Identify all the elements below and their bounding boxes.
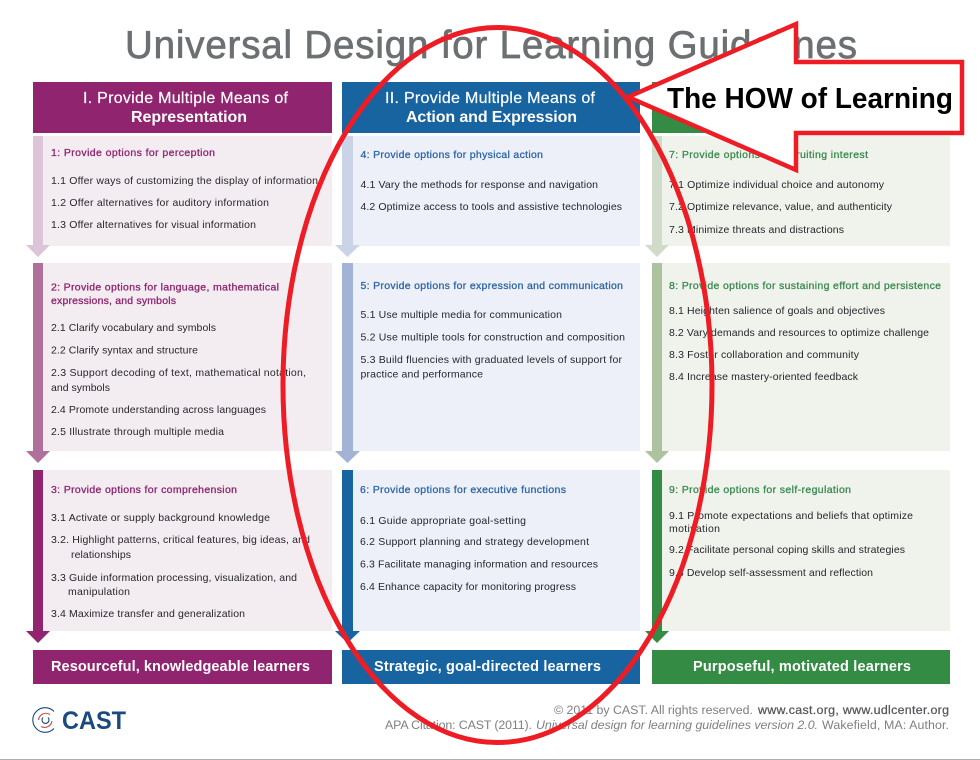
panel: guideline 9 self-regulation: motivation [669, 523, 720, 535]
panel: guideline 1 perception: 1.3 Offer alternatives for visual information [51, 219, 256, 231]
logo: CAST: CAST [62, 707, 126, 735]
panel: guideline 2 language: 2.3 Support decoding of text, mathematical notation, [51, 367, 306, 379]
panel: guideline 9 self-regulation: 9.3 Develop self-assessment and reflection [669, 567, 873, 579]
panel: guideline 4 physical action: 4: Provide options for physical action [360, 149, 543, 161]
panel: guideline 6 executive functions: 6.4 Enhance capacity for monitoring progress [360, 581, 576, 593]
header: action and expression: II. Provide Multiple Means of [385, 90, 596, 107]
panel: guideline 2 language: 2: Provide options for language, mathematical [51, 282, 279, 294]
header: representation [33, 82, 332, 133]
panel: guideline 2 language: 2.4 Promote understanding across languages [51, 404, 266, 416]
panel: guideline 8 sustaining effort: 8.4 Increase mastery-oriented feedback [669, 371, 859, 383]
column III: engagement [645, 82, 950, 684]
callout arrow: The HOW of Learning [628, 24, 962, 170]
panel: guideline 7 recruiting interest: 7.2 Optimize relevance, value, and authenticity [669, 201, 893, 213]
panel: guideline 7 recruiting interest: 7: Provide options for recruiting interest [669, 149, 868, 161]
footer bar: resourceful learners [33, 650, 332, 684]
panel: guideline 9 self-regulation [645, 470, 950, 643]
title: Universal Design for Learning Guidelines [125, 24, 857, 67]
panel: guideline 1 perception: 1.1 Offer ways of customizing the display of information [51, 175, 318, 187]
panel: guideline 6 executive functions: 6.1 Guide appropriate goal-setting [360, 515, 526, 527]
panel: guideline 3 comprehension: 3.1 Activate or supply background knowledge [51, 512, 270, 524]
footer bar: strategic learners: Strategic, goal-directed learners [374, 659, 601, 675]
panel: guideline 7 recruiting interest: 7.3 Minimize threats and distractions [669, 224, 844, 236]
footer bar: strategic learners [342, 650, 640, 684]
panel: guideline 2 language: expressions, and symbols [51, 295, 176, 307]
panel: guideline 8 sustaining effort: 8: Provide options for sustaining effort and persistence [669, 280, 941, 292]
panel: guideline 8 sustaining effort [645, 263, 950, 463]
panel: guideline 2 language [26, 263, 332, 463]
footer bar: purposeful learners: Purposeful, motivated learners [693, 659, 911, 675]
copyright and citation [385, 703, 949, 732]
panel: guideline 5 expression and communication: practice and performance [360, 368, 483, 380]
footer bar: resourceful learners: Resourceful, knowledgeable learners [51, 659, 310, 675]
panel: guideline 3 comprehension: 3: Provide options for comprehension [51, 484, 237, 496]
panel: guideline 2 language: and symbols [51, 382, 110, 394]
panel: guideline 5 expression and communication: 5.2 Use multiple tools for construction and composition [360, 332, 625, 344]
copyright and citation: APA Citation: CAST (2011). [385, 718, 532, 732]
footer bar: purposeful learners [652, 650, 950, 684]
panel: guideline 6 executive functions [335, 470, 640, 643]
panel: guideline 8 sustaining effort: 8.1 Heighten salience of goals and objectives [669, 305, 885, 317]
callout arrow: The HOW of Learning: The HOW of Learning [667, 83, 953, 115]
panel: guideline 7 recruiting interest [645, 136, 950, 257]
panel: guideline 5 expression and communication: 5.1 Use multiple media for communication [360, 309, 562, 321]
column I: representation [26, 82, 332, 684]
copyright and citation: www.cast.org, www.udlcenter.org [757, 703, 949, 717]
panel: guideline 3 comprehension [26, 470, 332, 643]
panel: guideline 3 comprehension: 3.2. Highlight patterns, critical features, big ideas, and [51, 534, 310, 546]
panel: guideline 6 executive functions: 6.3 Facilitate managing information and resources [360, 558, 598, 570]
header: representation: Representation [131, 109, 247, 126]
red ellipse annotation [283, 28, 712, 742]
copyright and citation: Universal design for learning guidelines version 2.0. [536, 718, 818, 732]
panel: guideline 3 comprehension: relationships [71, 549, 131, 561]
copyright and citation: © 2011 by CAST. All rights reserved. [554, 703, 753, 717]
panel: guideline 5 expression and communication [335, 263, 640, 463]
panel: guideline 8 sustaining effort: 8.2 Vary demands and resources to optimize challenge [669, 327, 929, 339]
panel: guideline 4 physical action: 4.1 Vary the methods for response and navigation [360, 179, 598, 191]
panel: guideline 8 sustaining effort: 8.3 Foster collaboration and community [669, 349, 860, 361]
panel: guideline 3 comprehension: 3.3 Guide information processing, visualization, and [51, 572, 297, 584]
panel: guideline 4 physical action: 4.2 Optimize access to tools and assistive technologies [360, 201, 622, 213]
header: engagement [652, 82, 950, 133]
panel: guideline 2 language: 2.1 Clarify vocabulary and symbols [51, 322, 216, 334]
panel: guideline 2 language: 2.2 Clarify syntax and structure [51, 344, 198, 356]
panel: guideline 6 executive functions: 6.2 Support planning and strategy development [360, 536, 589, 548]
panel: guideline 6 executive functions: 6: Provide options for executive functions [360, 484, 566, 496]
panel: guideline 3 comprehension: manipulation [68, 586, 130, 598]
header: action and expression [342, 82, 640, 133]
logo: CAST [33, 707, 126, 735]
panel: guideline 7 recruiting interest: 7.1 Optimize individual choice and autonomy [669, 179, 885, 191]
panel: guideline 1 perception [26, 136, 332, 257]
copyright and citation: Wakefield, MA: Author. [822, 718, 949, 732]
panel: guideline 5 expression and communication: 5: Provide options for expression and communication [360, 280, 623, 292]
header: action and expression: Action and Expression [406, 109, 577, 126]
header: representation: I. Provide Multiple Means of [83, 90, 289, 107]
panel: guideline 9 self-regulation: 9.2 Facilitate personal coping skills and strategies [669, 544, 905, 556]
panel: guideline 9 self-regulation: 9: Provide options for self-regulation [669, 484, 851, 496]
panel: guideline 1 perception: 1.2 Offer alternatives for auditory information [51, 197, 269, 209]
panel: guideline 1 perception: 1: Provide options for perception [51, 147, 215, 159]
panel: guideline 4 physical action [335, 136, 640, 257]
panel: guideline 5 expression and communication: 5.3 Build fluencies with graduated levels of support for [360, 354, 622, 366]
panel: guideline 2 language: 2.5 Illustrate through multiple media [51, 426, 224, 438]
panel: guideline 9 self-regulation: 9.1 Promote expectations and beliefs that optimize [669, 510, 913, 522]
panel: guideline 3 comprehension: 3.4 Maximize transfer and generalization [51, 608, 245, 620]
column II: action and expression [335, 82, 640, 684]
